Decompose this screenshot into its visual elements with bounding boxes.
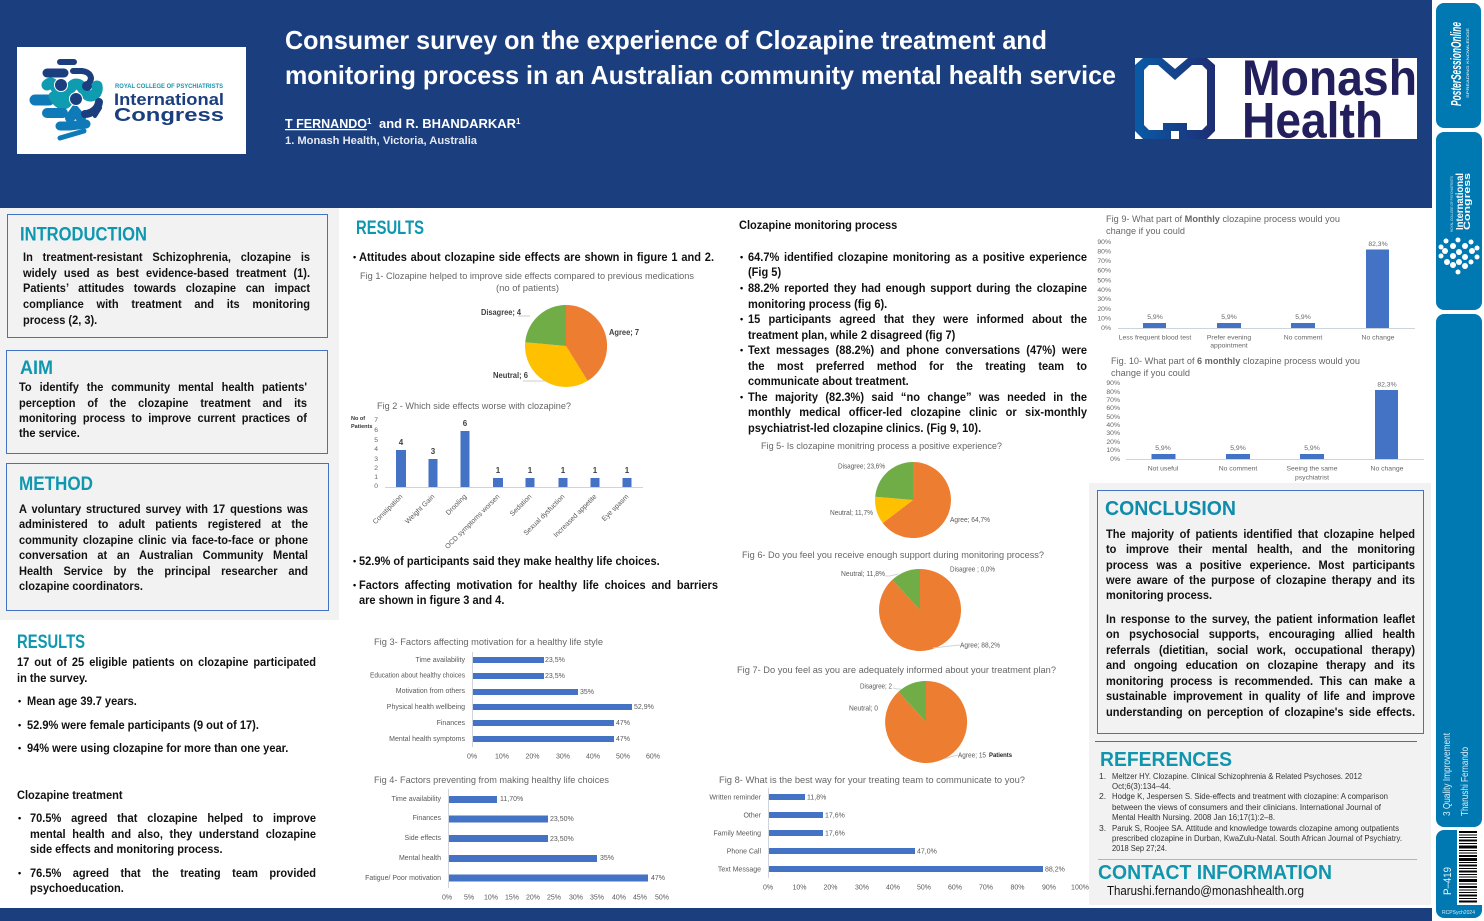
chart: figure 8 communication bar chart: 11,8% [807, 794, 826, 802]
text: email address: Tharushi.fernando@monashhealth.org [1107, 884, 1304, 898]
title [285, 25, 1116, 90]
chart: figure 4 preventing factors bar chart: Time availability [391, 796, 441, 803]
text: conclusion body: to improve their mental health, and the monitoring [1106, 542, 1415, 556]
text: conclusion body: process was a positive experience. Most participants [1106, 558, 1415, 572]
chart: figure 2 side effects bar chart: 3 [431, 447, 436, 456]
logo: Royal College of Psychiatrists International Congress [17, 47, 246, 154]
chart: figure 9 monthly process bar chart: 70% [1097, 258, 1111, 265]
chart: figure 3 motivation bar chart: 23,5% [545, 673, 565, 680]
chart: figure 8 communication bar chart: 88,2% [1045, 866, 1065, 874]
chart: figure 3 motivation bar chart: Physical health wellbeing [387, 704, 465, 711]
text: aim body: To identify the community mental health patients' [19, 380, 307, 394]
chart: figure 8 communication bar chart: Text Message [718, 866, 761, 874]
barcode [1459, 831, 1477, 902]
text: method body [19, 501, 312, 601]
chart: figure 4 preventing factors bar chart: 23,50% [550, 836, 574, 843]
heading: clozapine monitoring process: Clozapine monitoring process [739, 218, 897, 232]
text: monitoring bullets: monthly medical officer-led clozapine clinic or six-monthly [748, 405, 1087, 419]
chart: figure 4 preventing factors bar chart: Side effects [405, 835, 441, 842]
chart: figure 8 communication bar chart: 50% [917, 884, 931, 892]
text: monitoring bullets: (Fig 5) [748, 265, 781, 279]
chart: figure 9 monthly process bar chart: 60% [1097, 268, 1111, 274]
chart: figure 1 pie: Neutral; 6 [493, 371, 529, 380]
text: conclusion body: monitoring process. [1106, 588, 1212, 602]
text: conclusion body [1106, 526, 1417, 726]
chart: figure 2 side effects bar chart: 4 [399, 438, 404, 447]
chart: figure 9 monthly process bar chart: change if you could [1106, 226, 1185, 236]
chart: figure 8 communication bar chart: 70% [979, 884, 993, 892]
authors: 1 [516, 117, 521, 126]
chart: figure 3 motivation bar chart: 47% [616, 736, 630, 743]
chart: figure 10 six monthly process bar chart: change if you could [1111, 368, 1190, 378]
chart: figure 9 monthly process bar chart: 20% [1097, 306, 1111, 313]
text: healthy life choices bullets: • [353, 556, 356, 566]
text: conclusion body: referrals (dietitian, social work, occupational therapy) [1106, 643, 1415, 657]
chart: figure 5 pie [761, 441, 1002, 538]
chart: figure 3 motivation bar chart: Time availability [415, 657, 465, 664]
chart: figure 6 pie [742, 550, 1044, 651]
chart: figure 1 pie: Agree; 7 [609, 328, 640, 337]
text: clozapine treatment bullets: • [18, 813, 21, 823]
chart: figure 9 monthly process bar chart: No comment [1284, 334, 1322, 342]
text: attitudes bullet: Attitudes about clozapine side effects are shown in figure 1 and 2. [359, 250, 714, 264]
chart: figure 4 preventing factors bar chart: Fig 4- Factors preventing from making healthy life choices [374, 775, 609, 785]
chart: figure 2 side effects bar chart [351, 401, 643, 551]
chart: figure 2 side effects bar chart: 7 [374, 417, 378, 424]
chart: figure 8 communication bar chart: 17,6% [825, 830, 845, 838]
chart: figure 3 motivation bar chart: Mental health symptoms [389, 736, 465, 743]
sidebar tab: category and author: 3 Quality Improvement [1442, 733, 1453, 816]
text: introduction body: compliance with treatment and its monitoring [23, 297, 310, 311]
text: healthy life choices bullets: • [353, 580, 356, 590]
chart: figure 9 monthly process bar chart: No change [1362, 334, 1395, 342]
text: reference list: Paruk S, Roojee SA. Attitude and knowledge towards clozapine among outpatients [1112, 823, 1399, 833]
chart: figure 10 six monthly process bar chart: Not useful [1148, 466, 1179, 472]
chart: figure 7 pie: Agree; 15 [958, 752, 986, 760]
chart: figure 8 communication bar chart: Family Meeting [714, 830, 761, 838]
chart: figure 4 preventing factors bar chart: 5% [464, 894, 474, 902]
chart: figure 7 pie: Disagree; 2 [860, 684, 892, 690]
chart: figure 7 pie: Patients [989, 752, 1012, 759]
sidebar tab: category and author: Tharushi Fernando [1460, 747, 1471, 816]
text: monitoring bullets: • [740, 392, 743, 402]
chart: figure 10 six monthly process bar chart: Seeing the same [1286, 466, 1338, 472]
panel: contact information [1098, 862, 1332, 898]
logo: Monash Health: Monash [1242, 50, 1417, 106]
text: results summary: 52.9% were female participants (9 out of 17). [27, 718, 259, 732]
chart: figure 9 monthly process bar chart: 80% [1097, 248, 1111, 256]
text: clozapine treatment bullets [18, 810, 318, 899]
chart: figure 2 side effects bar chart: 1 [374, 474, 378, 481]
chart: figure 4 preventing factors bar chart: 25% [547, 894, 561, 902]
heading: references: REFERENCES [1100, 749, 1232, 771]
chart: figure 4 preventing factors bar chart: 45% [633, 894, 647, 902]
text: conclusion body: were aware of the purpose of clozapine therapy and its [1106, 573, 1415, 587]
chart: figure 2 side effects bar chart: Fig 2 - Which side effects worse with clozapine? [377, 401, 571, 411]
text: monitoring bullets: psychiatrist-led clozapine clinics. (Fig 9, 10). [748, 421, 981, 435]
panel: aim [6, 350, 328, 454]
text: healthy life choices bullets: Factors affecting motivation for healthy life choices and barriers [359, 578, 718, 592]
chart: figure 5 pie: Neutral; 11,7% [830, 510, 873, 517]
text: conclusion body: The majority of patients identified that clozapine helped [1106, 527, 1415, 541]
chart: figure 2 side effects bar chart: 3 [374, 456, 378, 463]
text: conclusion body: monitoring process is recommended. This can make a [1106, 674, 1415, 688]
chart: figure 2 side effects bar chart: 1 [593, 466, 598, 475]
chart: figure 7 pie [737, 665, 1056, 763]
chart: figure 10 six monthly process bar chart: 5,9% [1304, 445, 1320, 452]
sidebar tab: category and author [1436, 314, 1482, 827]
chart: figure 3 motivation bar chart: Finances [437, 720, 465, 727]
chart: figure 9 monthly process bar chart: 5,9% [1221, 314, 1237, 321]
text: results summary: Mean age 39.7 years. [27, 694, 137, 708]
chart: figure 10 six monthly process bar chart: 70% [1106, 397, 1120, 404]
chart: figure 4 preventing factors bar chart: 47% [651, 875, 665, 882]
text: results summary: in the survey. [17, 671, 87, 685]
chart: figure 2 side effects bar chart: OCD symptoms worsen [444, 493, 501, 551]
panel: introduction [8, 214, 328, 338]
chart: figure 8 communication bar chart: Phone Call [727, 848, 761, 856]
chart: figure 10 six monthly process bar chart: psychiatrist [1295, 474, 1329, 482]
chart: figure 10 six monthly process bar chart: 60% [1106, 405, 1120, 412]
chart: figure 3 motivation bar chart: 10% [495, 754, 509, 760]
chart: figure 9 monthly process bar chart: 82,3% [1368, 241, 1388, 248]
text: introduction body [23, 249, 315, 333]
chart: figure 3 motivation bar chart: 23,5% [545, 657, 565, 664]
chart: figure 8 communication bar chart: 90% [1042, 884, 1056, 892]
chart: figure 4 preventing factors bar chart: 11,70% [500, 796, 523, 803]
text: monitoring bullets: • [740, 314, 743, 324]
chart: figure 3 motivation bar chart: 0% [467, 754, 477, 760]
chart: figure 10 six monthly process bar chart: 5,9% [1155, 445, 1171, 452]
chart: figure 2 side effects bar chart: Constipation [372, 493, 404, 526]
chart: figure 9 monthly process bar chart: 0% [1101, 325, 1111, 332]
chart: figure 3 motivation bar chart: Motivation from others [396, 688, 465, 695]
chart: figure 2 side effects bar chart: 1 [561, 466, 566, 475]
chart: figure 1 pie: Fig 1- Clozapine helped to improve side effects compared to previous medications [360, 271, 694, 281]
chart: figure 4 preventing factors bar chart: 35% [600, 855, 614, 862]
text: results summary: 17 out of 25 eligible patients on clozapine participated [17, 655, 316, 669]
chart: figure 10 six monthly process bar chart: 82,3% [1377, 382, 1397, 388]
text: healthy life choices bullets: are shown in figure 3 and 4. [359, 593, 504, 607]
chart: figure 9 monthly process bar chart: appointment [1210, 342, 1248, 350]
chart: figure 10 six monthly process bar chart: 0% [1110, 456, 1120, 463]
text: reference list: prescribed clozapine in Durban, KwaZulu-Natal. South African Journal of Psychiatry. [1112, 833, 1402, 843]
chart: figure 6 pie: Fig 6- Do you feel you receive enough support during monitoring process? [742, 550, 1044, 560]
text: results summary: • [18, 743, 21, 753]
chart: figure 2 side effects bar chart: 5 [374, 437, 378, 444]
text: reference list: Oct;6(3):134–44. [1112, 781, 1171, 791]
chart: figure 4 preventing factors bar chart: Mental health [399, 855, 441, 862]
text: method body: A voluntary structured survey with 17 questions was [19, 502, 308, 516]
chart: figure 10 six monthly process bar chart: 5,9% [1230, 445, 1246, 452]
text: reference list: 1. [1099, 771, 1106, 781]
text: results summary: 94% were using clozapine for more than one year. [27, 741, 288, 755]
chart: figure 3 motivation bar chart [370, 637, 660, 760]
text: clozapine treatment bullets: mental health and also, they understand clozapine [30, 827, 316, 841]
chart: figure 10 six monthly process bar chart: 30% [1106, 430, 1120, 437]
chart: figure 4 preventing factors bar chart: Fatigue/ Poor motivation [365, 875, 441, 882]
text: conclusion body: understanding on perception of clozapine's side effects. [1106, 705, 1415, 719]
chart: figure 2 side effects bar chart: 0 [374, 483, 378, 490]
authors: 1. Monash Health, Victoria, Australia [285, 135, 478, 147]
chart: figure 2 side effects bar chart: Increased appetite [553, 493, 598, 539]
chart: figure 4 preventing factors bar chart: 10% [484, 894, 498, 902]
authors: 1 [367, 117, 372, 126]
text: healthy life choices bullets: 52.9% of participants said they make healthy life choices. [359, 554, 660, 568]
chart: figure 8 communication bar chart: 10% [792, 884, 807, 892]
chart: figure 6 pie: Disagree ; 0,0% [950, 566, 995, 574]
chart: figure 2 side effects bar chart: 4 [374, 446, 378, 453]
chart: figure 10 six monthly process bar chart [1106, 356, 1424, 482]
chart: figure 4 preventing factors bar chart: 30% [569, 894, 583, 902]
chart: figure 2 side effects bar chart: 2 [374, 465, 378, 472]
title: monitoring process in an Australian community mental health service [285, 60, 1116, 90]
text: clozapine treatment bullets: psychoeducation. [30, 881, 124, 895]
chart: figure 10 six monthly process bar chart: 20% [1106, 439, 1120, 446]
chart: figure 8 communication bar chart: 40% [886, 884, 900, 892]
chart: figure 1 pie: (no of patients) [496, 283, 559, 293]
text: introduction body: In treatment-resistant Schizophrenia, clozapine is [23, 250, 310, 264]
sidebar tab: poster number and barcode: P–419 [1442, 867, 1454, 895]
chart: figure 3 motivation bar chart: 60% [646, 754, 660, 760]
chart: figure 8 communication bar chart: 0% [763, 884, 773, 892]
chart: figure 8 communication bar chart: 47,0% [917, 848, 937, 856]
chart: figure 3 motivation bar chart: Fig 3- Factors affecting motivation for a healthy life style [374, 637, 603, 647]
chart: figure 8 communication bar chart: 17,6% [825, 812, 845, 820]
text: reference list: Hodge K, Jespersen S. Side-effects and treatment with clozapine: A comparison [1112, 791, 1388, 801]
text: conclusion body: on psychosocial supports, encouraging allied health [1106, 627, 1415, 641]
text: attitudes bullet: • [353, 252, 356, 262]
chart: figure 2 side effects bar chart: Weight Gain [404, 493, 436, 526]
chart: figure 8 communication bar chart: 80% [1010, 884, 1025, 892]
heading: aim: AIM [20, 358, 53, 379]
sidebar tab: International Congress [1436, 132, 1482, 310]
sidebar tab: International Congress: Congress [1462, 173, 1472, 230]
text: results summary: • [18, 720, 21, 730]
chart: figure 8 communication bar chart: 30% [855, 884, 869, 892]
chart: figure 3 motivation bar chart: Education about healthy choices [370, 672, 465, 680]
chart: figure 3 motivation bar chart: 52,9% [634, 704, 654, 711]
chart: figure 10 six monthly process bar chart: 80% [1106, 389, 1120, 396]
text: monitoring bullets: 15 participants agreed that they were informed about the [748, 312, 1087, 326]
heading: introduction: INTRODUCTION [20, 224, 147, 246]
chart: figure 4 preventing factors bar chart: 15% [505, 894, 519, 902]
logo: Monash Health [1135, 50, 1417, 148]
text: aim body: monitoring process to improve current practices of [19, 411, 307, 425]
chart: figure 10 six monthly process bar chart: No change [1371, 466, 1404, 472]
text: reference list [1099, 771, 1402, 853]
logo: Monash Health: Health [1242, 92, 1383, 148]
chart: figure 2 side effects bar chart: Drooling [445, 493, 468, 517]
chart: figure 4 preventing factors bar chart: 40% [612, 894, 626, 902]
chart: figure 2 side effects bar chart: No of [351, 416, 365, 422]
text: introduction body: process (2, 3). [23, 313, 97, 327]
chart: figure 1 pie: Disagree; 4 [481, 308, 522, 317]
chart: figure 2 side effects bar chart: Sedation [509, 493, 533, 518]
text: monitoring bullets: The majority (82.3%) said “no change” was needed in the [748, 390, 1087, 404]
bottom bar [0, 908, 1432, 921]
chart: figure 2 side effects bar chart: Eye spasm [601, 493, 631, 523]
chart: figure 9 monthly process bar chart: 90% [1097, 239, 1111, 246]
text: introduction body: Patients’ attitudes towards clozapine can impact [23, 281, 310, 295]
text: aim body: the service. [19, 426, 80, 440]
chart: figure 8 communication bar chart: 20% [823, 884, 838, 892]
text: reference list: 2. [1099, 791, 1106, 801]
text: monitoring bullets: Text messages (88.2%) and phone conversations (47%) were [748, 343, 1087, 357]
panel: method [6, 464, 328, 610]
chart: figure 8 communication bar chart: Fig 8- What is the best way for your treating team to communicate to you? [719, 775, 1025, 785]
authors: and R. BHANDARKAR [379, 117, 516, 131]
sidebar tab: International Congress: ROYAL COLLEGE OF PSYCHIATRISTS [1450, 175, 1454, 232]
chart: figure 2 side effects bar chart: 1 [528, 466, 533, 475]
chart: figure 4 preventing factors bar chart: 0% [442, 894, 452, 902]
chart: figure 5 pie: Fig 5- Is clozapine monitring process a positive experience? [761, 441, 1002, 451]
text: method body: Health Service by the principal researcher and [19, 564, 308, 578]
text: method body: administered to adult patients registered at the [19, 517, 308, 531]
text: method body: clozapine coordinators. [19, 579, 143, 593]
text: aim body: perception of the clozapine treatment and its [19, 396, 307, 410]
heading: contact information: CONTACT INFORMATION [1098, 862, 1332, 884]
chart: figure 2 side effects bar chart: Sexual dysfuction [523, 493, 566, 537]
text: conclusion body: and ongoing education on clozapine therapy and its [1106, 658, 1415, 672]
chart: figure 3 motivation bar chart: 47% [616, 720, 630, 727]
chart: figure 9 monthly process bar chart: 5,9% [1147, 314, 1163, 321]
text: monitoring bullets: 88.2% reported they had enough support during the clozapine [748, 281, 1087, 295]
text: aim body [19, 379, 311, 449]
text: conclusion body: In response to the survey, the patient information leaflet [1106, 612, 1415, 626]
chart: figure 10 six monthly process bar chart: 50% [1106, 414, 1120, 421]
logo: Royal College of Psychiatrists International Congress: International [114, 90, 224, 109]
heading: conclusion: CONCLUSION [1105, 498, 1236, 520]
chart: figure 9 monthly process bar chart: Fig 9- What part of Monthly clozapine process would you [1106, 214, 1340, 224]
logo: Royal College of Psychiatrists International Congress: ROYAL COLLEGE OF PSYCHIATRISTS [115, 83, 224, 90]
text: monitoring bullets [740, 249, 1089, 439]
chart: figure 7 pie: Neutral; 0 [849, 706, 878, 712]
text: method body: community clozapine clinic via face-to-face or phone [19, 533, 308, 547]
heading: clozapine treatment: Clozapine treatment [17, 788, 123, 802]
text: conclusion body: sustainable improvement in quality of life and improve [1106, 689, 1415, 703]
chart: figure 10 six monthly process bar chart: No comment [1219, 466, 1257, 472]
text: monitoring bullets: the most preferred method for the treating team to [748, 359, 1087, 373]
chart: figure 7 pie: Fig 7- Do you feel as you are adequately informed about your treatment plan? [737, 665, 1056, 675]
sidebar tab: poster number and barcode: RCPSych2024 [1442, 910, 1475, 916]
panel: conclusion [1098, 490, 1424, 734]
text: introduction body: widely used as best evidence-based treatment (1). [23, 266, 310, 280]
chart: figure 9 monthly process bar chart: 10% [1097, 316, 1111, 322]
chart: figure 9 monthly process bar chart: 5,9% [1295, 314, 1311, 321]
text: clozapine treatment bullets: 76.5% agreed that the treating team provided [30, 866, 316, 880]
chart: figure 9 monthly process bar chart: Prefer evening [1207, 334, 1251, 342]
text: reference list: 2018 Sep 27;24. [1112, 843, 1167, 853]
title: Consumer survey on the experience of Clozapine treatment and [285, 25, 1047, 55]
text: monitoring bullets: 64.7% identified clozapine monitoring as a positive experience [748, 250, 1087, 264]
text: reference list: between the views of consumers and their clinicians. International Journal of [1112, 802, 1382, 812]
chart: figure 4 preventing factors bar chart: Finances [413, 815, 441, 822]
text: results summary: • [18, 696, 21, 706]
text: monitoring bullets: • [740, 252, 743, 262]
text: monitoring bullets: • [740, 283, 743, 293]
chart: figure 2 side effects bar chart: 1 [625, 466, 630, 475]
chart: figure 9 monthly process bar chart: 40% [1097, 287, 1111, 294]
chart: figure 4 preventing factors bar chart: 20% [526, 894, 540, 902]
chart: figure 8 communication bar chart [709, 775, 1089, 892]
chart: figure 8 communication bar chart: Other [743, 812, 762, 820]
logo: Royal College of Psychiatrists International Congress: Congress [114, 105, 224, 125]
text: clozapine treatment bullets: side effects and monitoring process. [30, 842, 223, 856]
text: healthy life choices bullets [353, 553, 721, 611]
authors [285, 117, 521, 147]
chart: figure 9 monthly process bar chart: 50% [1097, 278, 1111, 284]
chart: figure 8 communication bar chart: 60% [948, 884, 962, 892]
chart: figure 5 pie: Disagree; 23,6% [838, 464, 885, 470]
chart: figure 2 side effects bar chart: 1 [496, 466, 501, 475]
text: clozapine treatment bullets: 70.5% agreed that clozapine helped to improve [30, 811, 316, 825]
authors: T FERNANDO [285, 117, 367, 131]
chart: figure 2 side effects bar chart: 6 [374, 427, 378, 434]
text: reference list: Mental Health Nursing. 2008 Jan 16;17(1):2–8. [1112, 812, 1275, 822]
heading: results middle: RESULTS [356, 218, 424, 239]
chart: figure 3 motivation bar chart: 35% [580, 689, 594, 696]
header banner [0, 0, 1432, 208]
chart: figure 4 preventing factors bar chart [365, 775, 669, 902]
text: clozapine treatment bullets: • [18, 868, 21, 878]
text: monitoring bullets: • [740, 345, 743, 355]
text: results summary [17, 654, 320, 757]
chart: figure 4 preventing factors bar chart: 23,50% [550, 816, 574, 823]
chart: figure 8 communication bar chart: 100% [1071, 884, 1089, 892]
chart: figure 3 motivation bar chart: 40% [586, 754, 600, 760]
chart: figure 2 side effects bar chart: 6 [463, 419, 468, 428]
chart: figure 5 pie: Agree; 64,7% [950, 517, 990, 524]
chart: figure 6 pie: Agree; 88,2% [960, 642, 1000, 650]
text: monitoring bullets: monitoring process (fig 6). [748, 297, 887, 311]
chart: figure 9 monthly process bar chart: Less frequent blood test [1119, 334, 1191, 342]
chart: figure 3 motivation bar chart: 30% [556, 754, 570, 760]
sidebar tab: poster number and barcode [1436, 830, 1482, 918]
chart: figure 8 communication bar chart: Written reminder [709, 794, 762, 802]
chart: figure 4 preventing factors bar chart: 50% [655, 894, 669, 902]
chart: figure 6 pie: Neutral; 11,8% [841, 571, 885, 578]
sidebar tab: Poster Session Online [1436, 3, 1481, 128]
panel: references [1099, 749, 1402, 853]
text: monitoring bullets: communicate about treatment. [748, 374, 909, 388]
chart: figure 9 monthly process bar chart: 30% [1097, 296, 1111, 303]
chart: figure 4 preventing factors bar chart: 35% [590, 894, 604, 902]
text: reference list: 3. [1099, 823, 1106, 833]
heading: results: RESULTS [17, 632, 85, 653]
heading: method: METHOD [19, 474, 93, 495]
text: method body: conversation at an Australian Community Mental [19, 548, 308, 562]
text: monitoring bullets: treatment plan, while 2 disagreed (fig 7) [748, 328, 955, 342]
chart: figure 10 six monthly process bar chart: Fig. 10- What part of 6 monthly clozapine process would you [1111, 356, 1360, 366]
text: reference list: Meltzer HY. Clozapine. Clinical Schizophrenia & Related Psychoses. 2012 [1112, 771, 1362, 781]
chart: figure 9 monthly process bar chart [1097, 214, 1415, 350]
chart: figure 10 six monthly process bar chart: 10% [1106, 447, 1120, 454]
chart: figure 2 side effects bar chart: Patients [351, 424, 372, 430]
icon: white dot globe [1438, 238, 1480, 274]
chart: figure 3 motivation bar chart: 20% [525, 754, 540, 760]
chart: figure 3 motivation bar chart: 50% [616, 754, 630, 760]
sidebar tab: International Congress: International [1455, 173, 1466, 230]
chart: figure 1 pie [360, 271, 694, 387]
panel: results left [17, 632, 320, 899]
sidebar tab: Poster Session Online: SPREADING KNOWLEDGE [1465, 28, 1470, 98]
chart: figure 10 six monthly process bar chart: 40% [1106, 422, 1120, 429]
chart: figure 10 six monthly process bar chart: 90% [1106, 380, 1120, 387]
